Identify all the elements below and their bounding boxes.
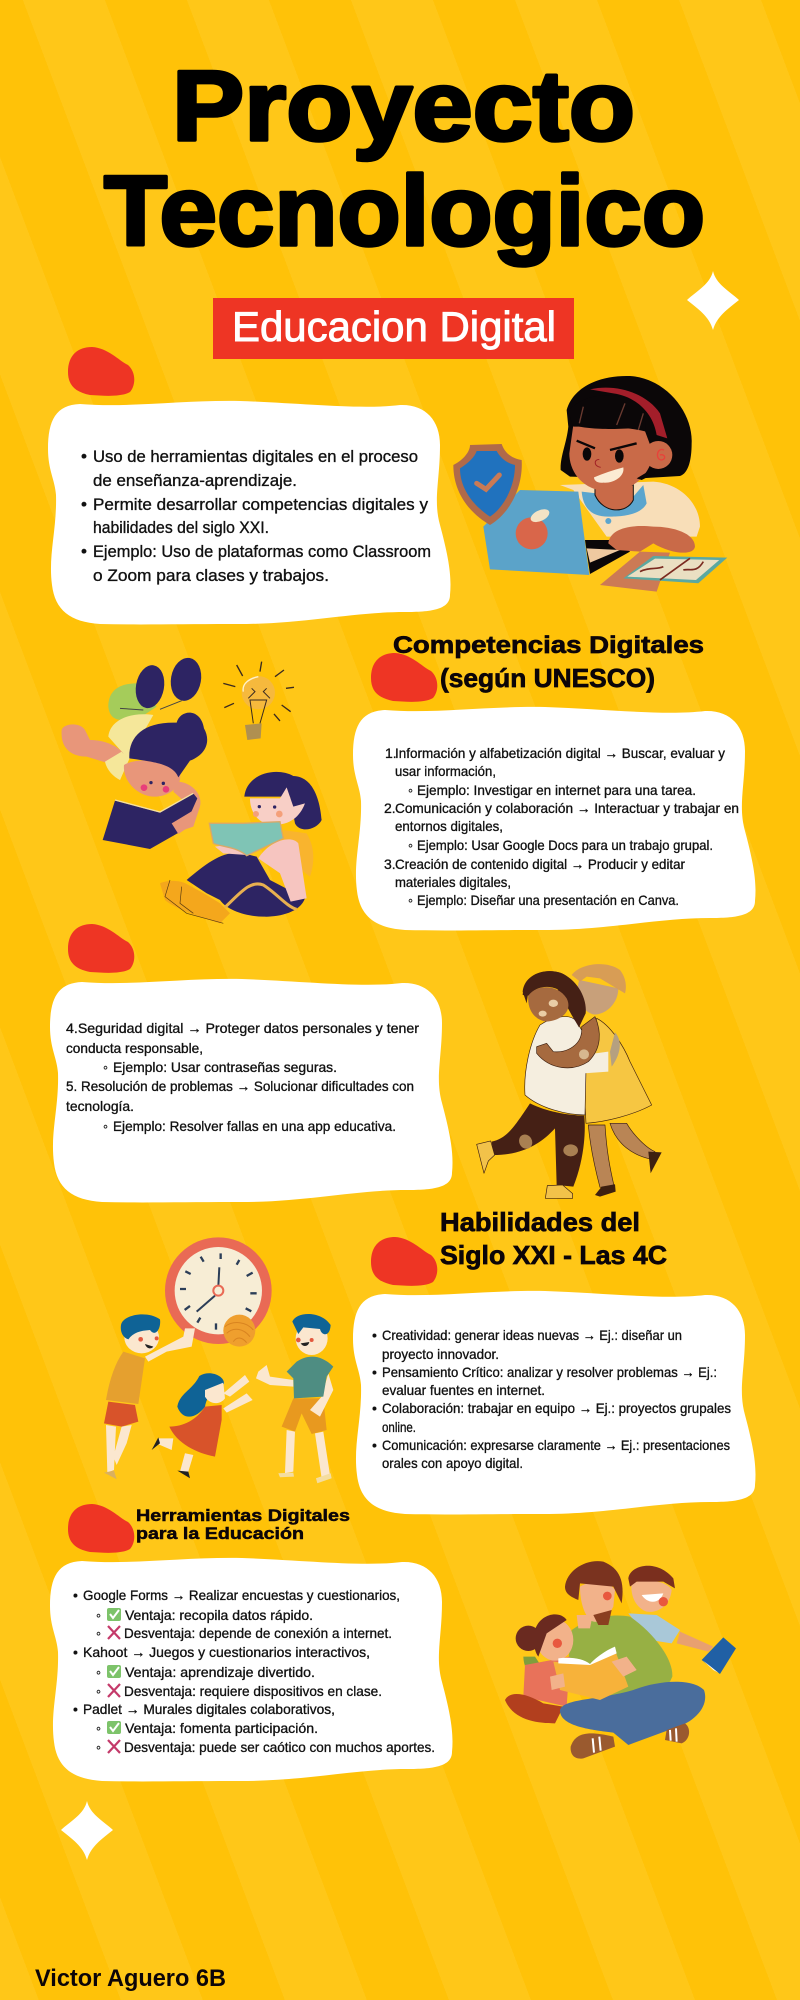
panel: introduction: • [81, 447, 87, 466]
panel: herramientas: Google Forms → Realizar encuestas y cuestionarios, [83, 1587, 400, 1603]
panel: las 4C: Pensamiento Crítico: analizar y resolver problemas → Ej.: [382, 1364, 717, 1380]
icon: sparkle bottom left [61, 1801, 113, 1860]
panel: herramientas: • [73, 1701, 78, 1717]
panel: herramientas: ◦ [96, 1664, 101, 1680]
panel: introduction: • [81, 495, 87, 514]
panel: competencias 1-3: entornos digitales, [395, 818, 503, 834]
subtitle banner [213, 298, 574, 359]
panel: herramientas: ◦ [96, 1720, 101, 1736]
panel: herramientas: ◦ [96, 1625, 101, 1641]
panel: herramientas: • [73, 1644, 78, 1660]
panel: las 4C: • [372, 1327, 377, 1343]
panel: herramientas [50, 1558, 453, 1781]
panel: las 4C: online. [382, 1419, 416, 1435]
footer author: Victor Aguero 6B [35, 1965, 226, 1992]
panel: herramientas: • [73, 1587, 78, 1603]
red blob 4 [371, 1237, 437, 1286]
panel: competencias 1-3: Ejemplo: Usar Google Docs para un trabajo grupal. [417, 837, 713, 853]
heading: herramientas digitales [136, 1506, 350, 1543]
title [104, 50, 705, 266]
heading: habilidades: Habilidades del [440, 1207, 640, 1237]
illustration: girl with laptop and shield [453, 376, 727, 592]
title: Proyecto [172, 50, 635, 161]
heading: habilidades [440, 1207, 667, 1270]
heading: herramientas digitales: para la Educación [136, 1524, 304, 1543]
panel: introduction: Uso de herramientas digitales en el proceso [93, 447, 418, 466]
panel: competencias 1-3: materiales digitales, [395, 874, 511, 890]
panel: herramientas: Ventaja: fomenta participación. [125, 1720, 318, 1736]
illustration: clock and children [104, 1237, 333, 1483]
panel: competencias 1-3: 3. [384, 856, 396, 872]
panel: competencias 1-3 [353, 707, 756, 930]
illustration: children reading [62, 655, 322, 923]
heading: habilidades: Siglo XXI - Las 4C [440, 1240, 667, 1270]
panel: las 4C: • [372, 1364, 377, 1380]
panel: competencias 4-5: Ejemplo: Usar contraseñas seguras. [113, 1059, 337, 1075]
red blob 2 [371, 653, 437, 702]
panel: introduction: de enseñanza-aprendizaje. [93, 471, 297, 490]
panel: las 4C: • [372, 1437, 377, 1453]
panel: competencias 4-5: 4.Seguridad digital → Proteger datos personales y tener [66, 1020, 419, 1036]
panel: competencias 1-3: Creación de contenido digital → Producir y editar [395, 856, 685, 872]
panel: competencias 1-3: Información y alfabetización digital → Buscar, evaluar y [395, 745, 725, 761]
panel: competencias 1-3: ◦ [408, 782, 413, 798]
red blob 5 [68, 1504, 134, 1553]
panel: competencias 4-5: ◦ [103, 1059, 108, 1075]
panel: introduction: • [81, 542, 87, 561]
subtitle banner: Educacion Digital [232, 303, 556, 350]
panel: herramientas: Kahoot → Juegos y cuestionarios interactivos, [83, 1644, 370, 1660]
panel: las 4C: • [372, 1400, 377, 1416]
illustration: family reading [505, 1561, 736, 1759]
panel: introduction [48, 401, 451, 624]
panel: introduction: Ejemplo: Uso de plataformas como Classroom [93, 542, 431, 561]
panel: competencias 1-3: 2. [384, 800, 396, 816]
icon: sparkle top right [687, 271, 739, 330]
panel: las 4C: proyecto innovador. [382, 1346, 499, 1362]
panel: introduction: o Zoom para clases y trabajos. [93, 566, 329, 585]
panel: herramientas: Ventaja: aprendizaje divertido. [125, 1664, 315, 1680]
panel: competencias 4-5: ◦ [103, 1118, 108, 1134]
panel: herramientas: Desventaja: depende de conexión a internet. [124, 1625, 392, 1641]
panel: las 4C: Colaboración: trabajar en equipo → Ej.: proyectos grupales [382, 1400, 731, 1416]
panel: competencias 1-3: ◦ [408, 837, 413, 853]
heading: herramientas digitales: Herramientas Digitales [136, 1506, 350, 1525]
panel: herramientas: Ventaja: recopila datos rápido. [125, 1607, 313, 1623]
panel: herramientas: ◦ [96, 1739, 101, 1755]
panel: las 4C: Creatividad: generar ideas nuevas → Ej.: diseñar un [382, 1327, 682, 1343]
panel: competencias 1-3: usar información, [395, 763, 496, 779]
panel: herramientas: ◦ [96, 1607, 101, 1623]
panel: introduction: habilidades del siglo XXI. [93, 518, 269, 537]
panel: las 4C: orales con apoyo digital. [382, 1455, 523, 1471]
heading: competencias digitales [393, 632, 704, 693]
title: Tecnologico [104, 155, 705, 266]
panel: herramientas: Padlet → Murales digitales colaborativos, [83, 1701, 335, 1717]
panel: las 4C: Comunicación: expresarse claramente → Ej.: presentaciones [382, 1437, 730, 1453]
panel: competencias 1-3: Ejemplo: Investigar en internet para una tarea. [417, 782, 696, 798]
panel: competencias 4-5: tecnología. [66, 1098, 134, 1114]
panel: las 4C [353, 1291, 756, 1514]
heading: competencias digitales: Competencias Digitales [393, 632, 704, 659]
panel: competencias 4-5: 5. Resolución de problemas → Solucionar dificultades con [66, 1078, 414, 1094]
panel: competencias 4-5: Ejemplo: Resolver fallas en una app educativa. [113, 1118, 396, 1134]
panel: herramientas: Desventaja: requiere dispositivos en clase. [124, 1683, 382, 1699]
red blob 1 [68, 347, 134, 396]
panel: las 4C: evaluar fuentes en internet. [382, 1382, 545, 1398]
panel: competencias 1-3: Comunicación y colaboración → Interactuar y trabajar en [395, 800, 739, 816]
panel: competencias 1-3: ◦ [408, 892, 413, 908]
heading: competencias digitales: (según UNESCO) [440, 663, 655, 693]
red blob 3 [68, 924, 134, 973]
panel: competencias 1-3: Ejemplo: Diseñar una presentación en Canva. [417, 892, 679, 908]
panel: herramientas: ◦ [96, 1683, 101, 1699]
illustration: two friends hugging [477, 964, 662, 1198]
panel: competencias 4-5 [50, 979, 453, 1202]
panel: competencias 1-3: 1. [385, 745, 397, 761]
panel: competencias 4-5: conducta responsable, [66, 1040, 203, 1056]
panel: introduction: Permite desarrollar competencias digitales y [93, 495, 428, 514]
panel: herramientas: Desventaja: puede ser caótico con muchos aportes. [124, 1739, 435, 1755]
